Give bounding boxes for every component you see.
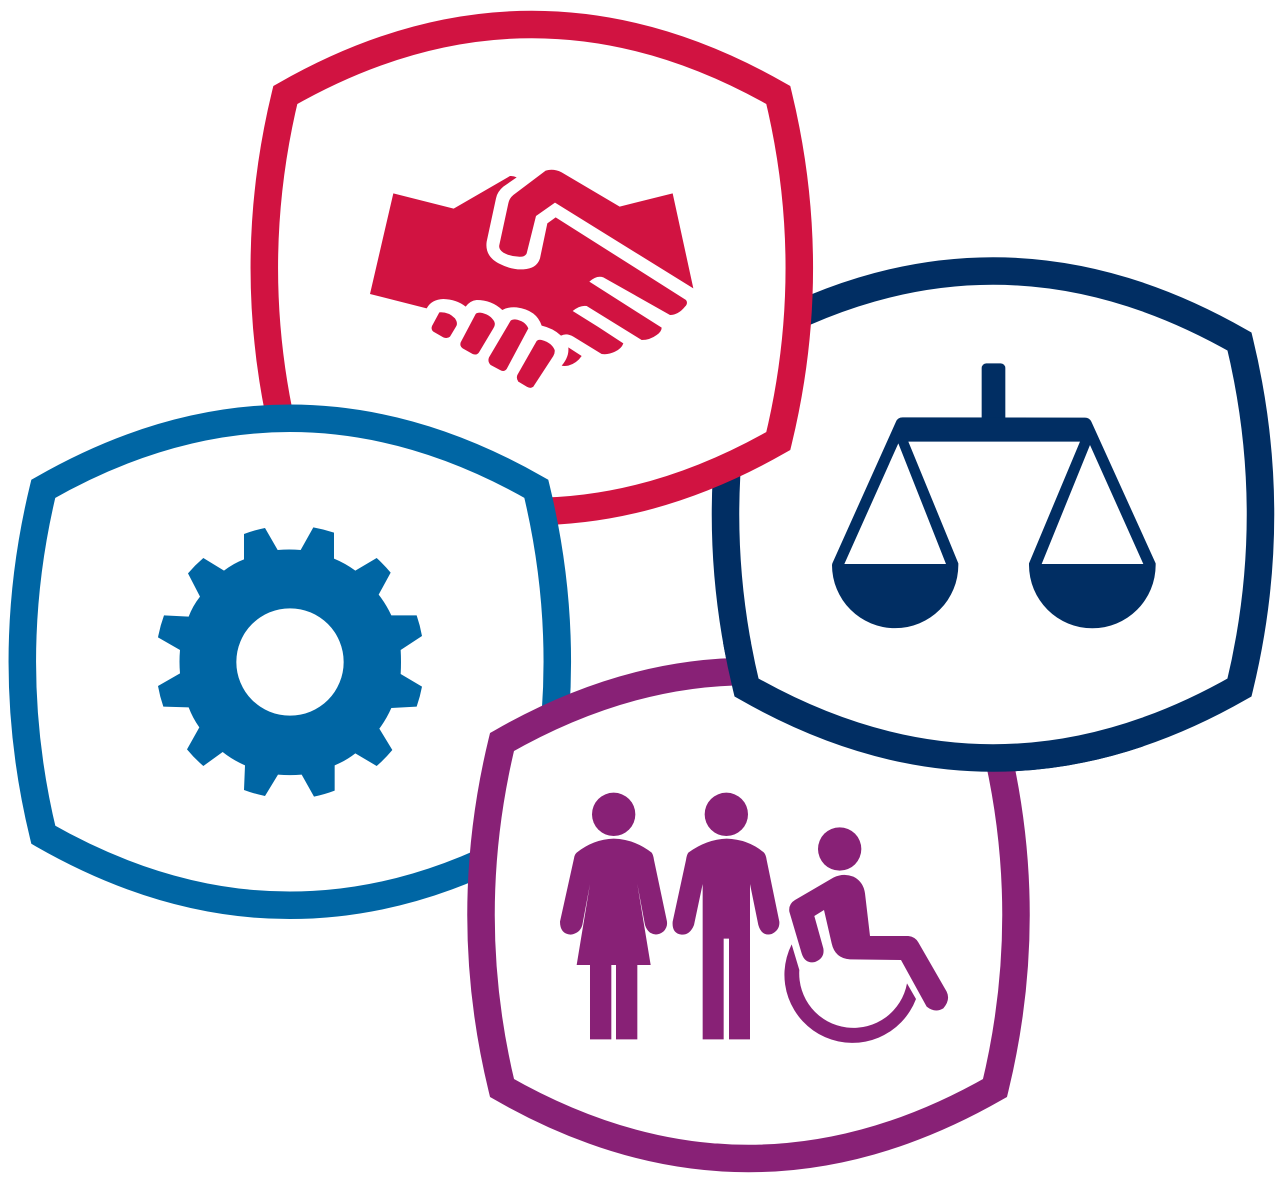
navy frame overlap over purple (723, 643, 1142, 772)
purple shield frame (481, 672, 1016, 1158)
red shield frame (264, 24, 799, 512)
panel: red handshake (264, 24, 799, 512)
icon: handshake (370, 170, 693, 388)
navy shield frame (726, 271, 1260, 758)
panel: navy scales of justice (726, 271, 1260, 758)
icon: scales of justice (832, 363, 1156, 628)
icon: gear (158, 527, 422, 797)
blue shield frame (22, 418, 557, 905)
icon: woman, man and wheelchair user (560, 793, 948, 1043)
panel: blue gear (22, 418, 557, 905)
panel: purple people (481, 672, 1016, 1158)
